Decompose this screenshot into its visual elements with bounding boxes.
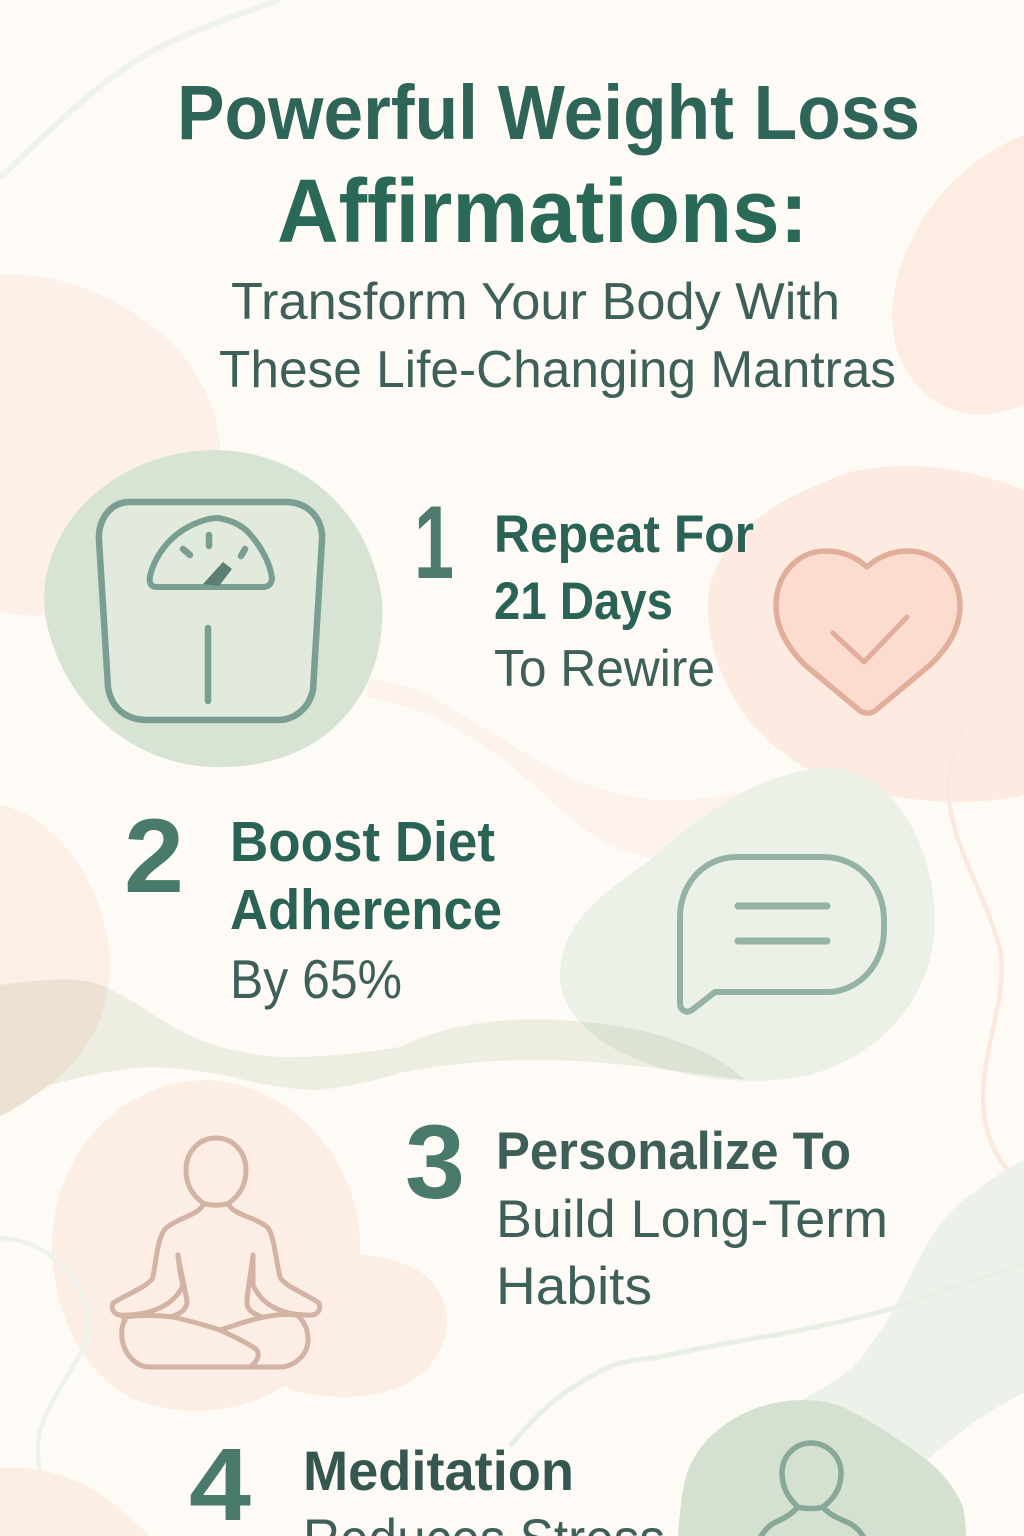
item 4 text: Meditation [303, 1439, 574, 1502]
item 3 text [496, 1122, 888, 1316]
item 1 text [494, 505, 754, 698]
item 4 [189, 1427, 665, 1536]
item 3 text: Habits [496, 1257, 652, 1316]
subtitle: Transform Your Body With [231, 273, 840, 331]
icon: heart with check [776, 551, 960, 713]
item 3 text: Build Long-Term [496, 1190, 888, 1249]
subtitle [219, 273, 896, 399]
title [177, 70, 920, 262]
item 1 text: Repeat For [494, 505, 754, 564]
icon: meditating person [112, 1138, 320, 1367]
item 2 text: Adherence [230, 878, 502, 942]
number 2: 2 [124, 798, 184, 915]
item 1 [414, 485, 754, 698]
icon: bathroom scale [99, 502, 322, 720]
subtitle: These Life-Changing Mantras [219, 341, 896, 399]
number 1: 1 [414, 485, 454, 601]
item 2 text [230, 810, 502, 1010]
number 3: 3 [405, 1104, 465, 1221]
icon: speech bubble [680, 857, 884, 1012]
item 2 text: By 65% [230, 948, 402, 1010]
title: Affirmations: [277, 162, 808, 262]
item 2 [124, 798, 502, 1010]
item 1 text: 21 Days [494, 572, 673, 631]
item 4 text [303, 1439, 665, 1536]
icon: person [760, 1443, 864, 1536]
item 3 [405, 1104, 888, 1316]
item 3 text: Personalize To [496, 1122, 851, 1181]
item 1 text: To Rewire [494, 640, 715, 698]
item 2 text: Boost Diet [230, 810, 495, 874]
title: Powerful Weight Loss [177, 70, 920, 156]
